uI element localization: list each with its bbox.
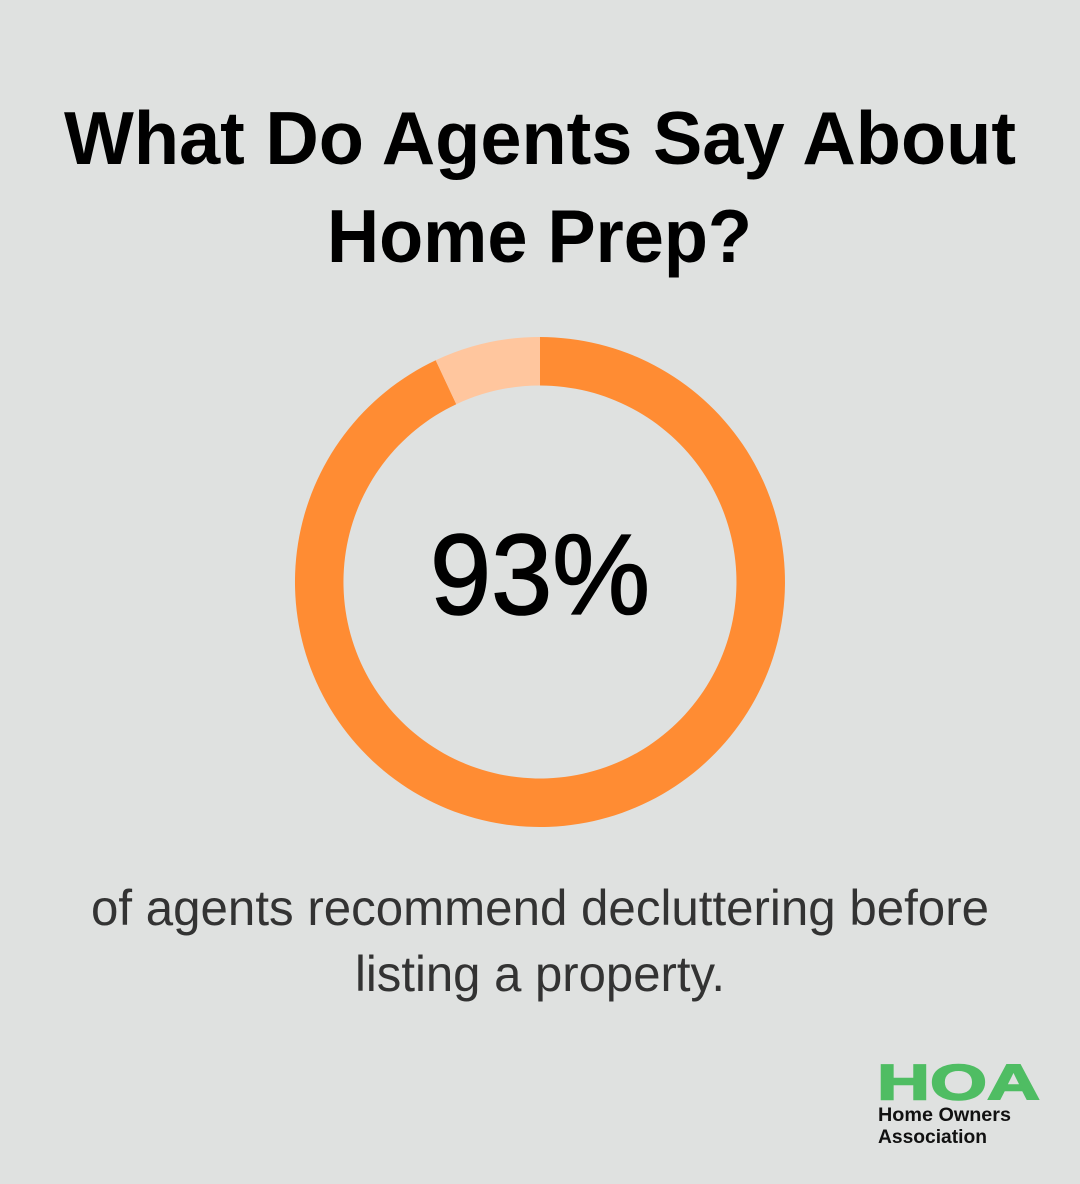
center value: 93% [430,512,650,639]
description text [91,880,989,1002]
title [64,96,1016,278]
title: What Do Agents Say About [64,96,1016,180]
logo tagline [878,1105,1011,1148]
description text: listing a property. [355,946,725,1002]
donut segment: remaining 7 percent [436,337,540,404]
logo: Home Owners Association [877,1054,1040,1148]
donut chart: 93 percent [295,337,785,827]
description text: of agents recommend decluttering before [91,880,989,936]
logo tagline: Home Owners [878,1105,1011,1126]
logo wordmark: HOA [877,1054,1040,1110]
logo tagline: Association [878,1127,987,1148]
title: Home Prep? [327,194,752,278]
donut segment: 93 percent [295,337,785,827]
